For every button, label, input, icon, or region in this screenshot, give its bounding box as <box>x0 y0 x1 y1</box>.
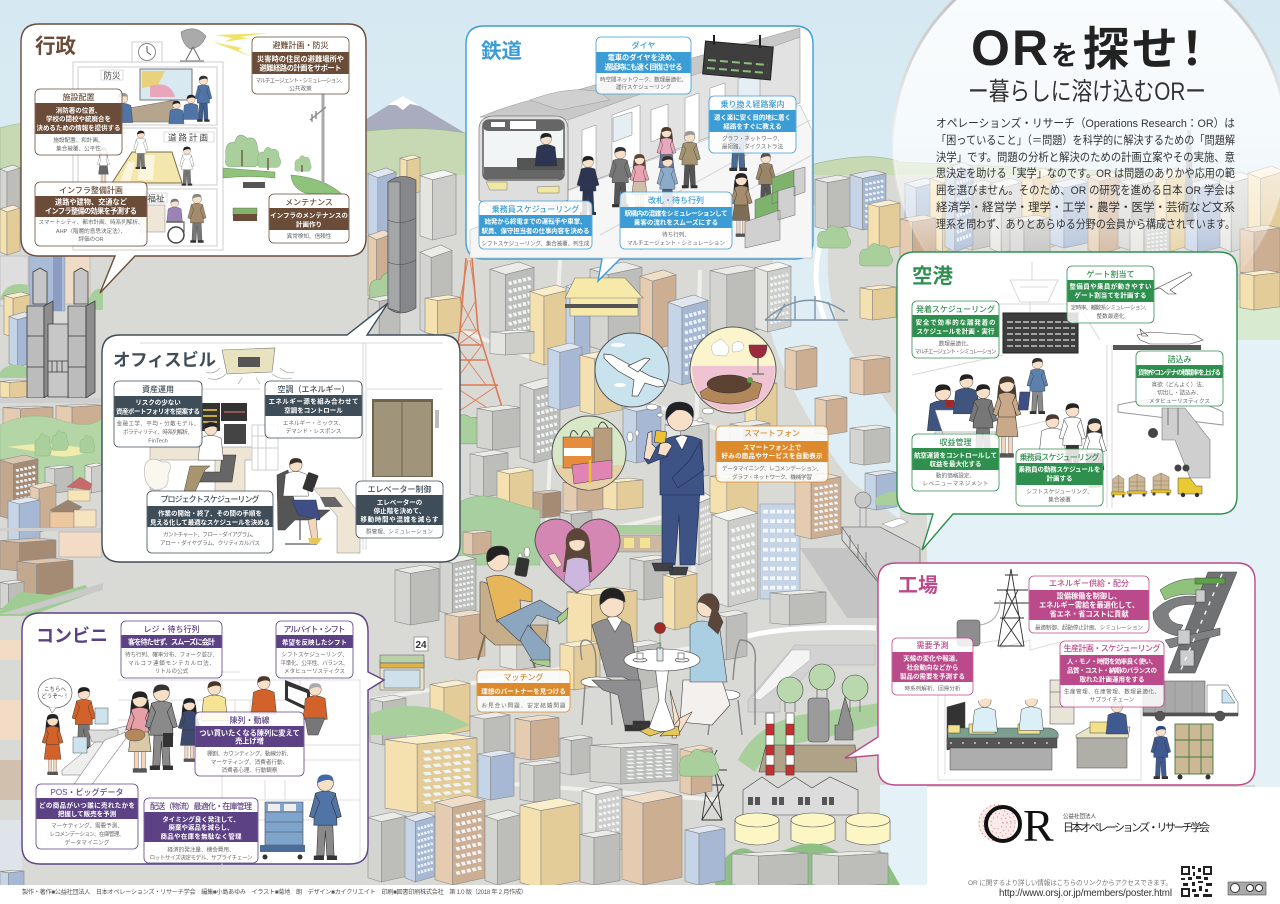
illustration: store interior: こちらへ <box>44 686 66 693</box>
pylon <box>697 750 727 820</box>
card: レジ・待ち行列: リトルの公式 <box>155 667 189 675</box>
airport terminal <box>842 492 920 582</box>
right water <box>880 505 1280 890</box>
heading: 行政 <box>35 35 76 58</box>
card: 需要予測: 需要予測 <box>916 640 948 650</box>
card: インフラ整備計画: スマートシティ、都市計画、時系列解析、 <box>38 218 144 226</box>
table with couple <box>581 588 755 738</box>
logo: OR society: R <box>1023 800 1054 851</box>
heading: 空港 <box>912 265 953 288</box>
card: スマートフォン <box>716 426 828 482</box>
thought bubble: steak <box>690 327 776 413</box>
shrub <box>679 749 719 776</box>
skyline right <box>905 178 937 248</box>
card: 生産計画・スケジューリング: 取れた計画運用をする <box>1080 674 1144 684</box>
card: メンテナンス: 計画作り <box>296 220 322 228</box>
card: 配送（物流）最適化・在庫管理: 廃棄や返品を減らし、 <box>168 822 234 832</box>
card: インフラ整備計画: 評価のOR <box>78 235 104 243</box>
card: 避難計画・防災: 避難計画・防災 <box>272 40 328 50</box>
tall grey tower <box>388 176 416 313</box>
illustration: city hall: 道路計画 <box>168 132 210 142</box>
mountain <box>330 96 480 142</box>
card: 需要予測: 時系列解析、回帰分析 <box>905 684 961 692</box>
heading: 鉄道 <box>481 40 522 63</box>
card: 施設配置: 消防署の位置、 <box>56 106 101 114</box>
card: POS・ビッグデータ: 把握して販売を予測 <box>58 809 117 818</box>
card: ダイヤ: 電車のダイヤを決め、 <box>608 53 679 62</box>
card: 乗務員スケジューリング: 乗務員の勤務スケジュールを <box>1018 464 1100 474</box>
footer white area <box>0 787 1280 904</box>
card: 収益管理: 航空運賃をコントロールして <box>914 450 997 460</box>
card: 空調（エネルギー）: 空調をコントロール <box>284 406 343 414</box>
card: ダイヤ <box>596 37 691 94</box>
card: 乗り換え経路案内: 経路をすぐに教える <box>723 122 782 130</box>
card: 発着スケジューリング: 発着スケジューリング <box>916 304 995 314</box>
panel: airport <box>897 252 1237 550</box>
card: 需要予測: 社会動向などから <box>906 662 958 672</box>
card: エネルギー供給・配分: 最適制御、起動停止計画、シミュレーション <box>1035 624 1143 632</box>
illustration: city hall <box>73 29 343 250</box>
card: スマートフォン: グラフ・ネットワーク、機械学習 <box>732 473 812 481</box>
card: レジ・待ち行列: 待ち行列、確率分布、フォーク並び、 <box>125 650 218 658</box>
card: ゲート割当て <box>1067 266 1154 323</box>
title: 探 <box>1083 23 1129 75</box>
card: エレベーター制御: 移動時間や混雑を減らす <box>360 514 439 524</box>
CC badge <box>1228 882 1266 895</box>
title: せ <box>1132 23 1178 75</box>
card: ゲート割当て: ゲート割当てを計画する <box>1074 290 1146 300</box>
panel: railway <box>466 26 813 281</box>
card: 資産運用: FinTech <box>148 438 168 444</box>
center scene: people <box>478 327 776 776</box>
card: アルバイト・シフト: メタヒューリスティクス <box>284 667 345 675</box>
card: プロジェクトスケジューリング: 作業の開始・終了、その間の手順を <box>158 508 262 518</box>
card: 施設配置 <box>35 89 122 155</box>
card: インフラ整備計画 <box>35 182 147 246</box>
card: スマートフォン: スマートフォン <box>744 429 800 438</box>
card: スマートフォン: 好みの商品やサービスを自動表示 <box>722 451 823 460</box>
title: O <box>971 20 1010 76</box>
card: 収益管理: 収益管理 <box>940 437 972 447</box>
sky-side buildings <box>815 175 851 230</box>
yellow station roof <box>565 278 643 316</box>
bridge <box>765 296 848 320</box>
thought bubble: shopping <box>552 416 626 490</box>
card: 避難計画・防災: 災害時の住民の避難場所や <box>257 54 344 64</box>
card: 資産運用: リスクの少ない <box>135 398 181 406</box>
card: プロジェクトスケジューリング: アロー・ダイヤグラム、クリティカルパス <box>160 539 260 547</box>
card: レジ・待ち行列 <box>121 621 222 678</box>
intro text: 思決定を助ける「実学」なのです。OR は問題のありかや応用の範 <box>936 166 1235 180</box>
card: 施設配置: 学校の閉校や統廃合を <box>46 114 111 123</box>
card: 発着スケジューリング: 安全で効率的な離発着の <box>916 318 996 326</box>
card: 詰込み: 詰込み <box>1168 354 1192 364</box>
illustration: office interior <box>120 343 443 553</box>
card: 詰込み: 貨物やコンテナの積載率を上げる <box>1138 368 1221 376</box>
card: POS・ビッグデータ <box>36 784 138 849</box>
card: プロジェクトスケジューリング: 見える化して最適なスケジュールを決める <box>150 518 270 526</box>
card: マッチング <box>477 670 570 712</box>
footer link text: OR に関するより詳しい情報はこちらのリンクからアクセスできます。 <box>968 878 1172 887</box>
card: 改札・待ち行列: 駅構内の混雑をシミュレーションして <box>624 208 728 218</box>
card: ゲート割当て: ゲート割当て <box>1086 269 1134 279</box>
card: ダイヤ: 運行スケジューリング <box>616 83 672 91</box>
intro text: 「困っていること」（＝問題）を科学的に解決するための「問題解 <box>936 133 1235 147</box>
card: 陳列・動線: 消費者心理、行動観察 <box>222 766 278 774</box>
card: インフラ整備計画: インフラ整備計画 <box>59 185 123 195</box>
card: レジ・待ち行列: マルコフ連鎖モンテカルロ法、 <box>128 659 215 667</box>
illustration: store interior: どうぞ〜！ <box>41 692 69 700</box>
river <box>768 205 900 520</box>
card: 施設配置: 決めるための情報を提供する <box>36 123 120 132</box>
card: 乗務員スケジューリング: シフトスケジューリング、集合被覆、列生成 <box>482 240 590 248</box>
card: アルバイト・シフト: 平準化、公平性、バランス、 <box>280 659 348 667</box>
card: 収益管理: レベニューマネジメント <box>922 480 988 488</box>
panel: convenience store <box>22 613 384 870</box>
card: 需要予測 <box>892 638 973 695</box>
card: 改札・待ち行列: 待ち行列、 <box>662 230 690 238</box>
card: 配送（物流）最適化・在庫管理: ロットサイズ決定モデル、サプライチェーン <box>150 854 253 862</box>
card: 発着スケジューリング: 数理最適化、 <box>939 340 972 348</box>
card: ダイヤ: 遅延時にも速く回復させる <box>604 62 682 72</box>
heading: 工場 <box>898 574 938 597</box>
card: 収益管理: 収益を最大化する <box>930 459 982 468</box>
card: マッチング: お見合い問題、安定結婚問題 <box>482 702 566 710</box>
card: 避難計画・防災 <box>252 37 349 94</box>
twin towers <box>27 268 95 398</box>
card: 生産計画・スケジューリング: 人・モノ・時間を効率良く使い、 <box>1067 656 1157 666</box>
card: 乗り換え経路案内: 乗り換え経路案内 <box>720 99 784 109</box>
illustration: airport terminal <box>912 262 1223 508</box>
card: ダイヤ: 時空間ネットワーク、数理最適化、 <box>600 76 687 84</box>
intro text <box>936 116 1235 231</box>
buildings at middle upper <box>368 168 396 238</box>
card: インフラ整備計画: インフラ整備の効果を予測する <box>45 206 137 216</box>
left strip <box>0 165 20 215</box>
card: 空調（エネルギー）: エネルギー・ミックス、 <box>283 420 344 427</box>
footer link text <box>968 878 1172 899</box>
intro text: オペレーションズ・リサーチ（Operations Research：OR）は <box>936 116 1235 130</box>
card: インフラ整備計画: AHP（階層的意思決定法）、 <box>56 227 126 235</box>
card: エネルギー供給・配分 <box>1029 576 1149 633</box>
card: エレベーター制御: エレベーターの <box>377 498 423 506</box>
card: 乗務員スケジューリング: 乗務員スケジューリング <box>1020 452 1100 462</box>
card: 陳列・動線: マーケティング、消費者行動、 <box>211 758 288 766</box>
card: エレベーター制御: 群管理、シミュレーション <box>366 528 433 536</box>
card: 乗務員スケジューリング: 駅員、保守担当者の仕事内容を決める <box>482 226 590 235</box>
card: 乗務員スケジューリング: 計画する <box>1046 474 1072 482</box>
card: 避難計画・防災: 公共政策 <box>289 84 312 92</box>
card: プロジェクトスケジューリング: プロジェクトスケジューリング <box>160 494 260 504</box>
card: 発着スケジューリング <box>912 301 999 358</box>
card: 資産運用: 資産運用 <box>142 384 174 394</box>
card: 陳列・動線: つい買いたくなる陳列に変えて <box>199 728 300 738</box>
logo: OR society: 公益社団法人 <box>1063 812 1097 820</box>
standing man with smartphone <box>644 402 704 575</box>
Tokyo tower <box>446 258 506 420</box>
intro text: 決学」です。問題の分析と解決のための計画立案やその実施、意 <box>936 150 1235 164</box>
card: メンテナンス: インフラのメンテナンスの <box>270 212 348 220</box>
card: ゲート割当て: 整数最適化 <box>1097 312 1125 320</box>
card: 詰込み: 切出し・詰込み、 <box>1157 388 1202 396</box>
card: 配送（物流）最適化・在庫管理: 配送（物流）最適化・在庫管理 <box>150 801 252 811</box>
title: を <box>1051 41 1078 71</box>
card: 資産運用 <box>114 381 202 447</box>
card: 避難計画・防災: 避難経路の計画をサポート <box>260 64 342 72</box>
card: 配送（物流）最適化・在庫管理: タイミング良く発注して、 <box>162 814 240 824</box>
card: メンテナンス <box>269 194 349 243</box>
card: レジ・待ち行列: 客を待たせず、スムーズに会計 <box>128 638 216 646</box>
card: 陳列・動線 <box>195 712 304 776</box>
credits: 製作・著作■公益社団法人 日本オペレーションズ・リサーチ学会 編集■小島あゆみ イラスト■菊地 朗 デザイン■カイクリエイト 印刷■図書印刷株式会社 第 1.0 版（2018 年 2 月作成） <box>22 888 527 896</box>
card: 生産計画・スケジューリング: 生産管理、在庫管理、数理最適化、 <box>1064 688 1160 696</box>
footer link text: http://www.orsj.or.jp/members/poster.html <box>999 888 1172 899</box>
card: 生産計画・スケジューリング: 品質・コスト・納期のバランスの <box>1067 666 1158 674</box>
intro text: 理系を問わず、ありとあらゆる分野の会員から構成されています。 <box>936 218 1235 231</box>
card: 乗り換え経路案内: グラフ・ネットワーク、 <box>722 134 783 142</box>
card: 避難計画・防災: マルチエージェント・シミュレーション、 <box>256 78 346 84</box>
card: 詰込み: メタヒューリスティクス <box>1149 397 1210 405</box>
card: 空調（エネルギー）: 空調（エネルギー） <box>278 384 350 394</box>
bottom blocks <box>370 695 406 745</box>
card: エレベーター制御: エレベーター制御 <box>368 484 432 494</box>
convenience store building <box>380 637 428 690</box>
logo: OR society <box>978 800 1210 851</box>
card: エレベーター制御 <box>356 481 443 538</box>
illustration: factory floor <box>938 569 1238 780</box>
card: プロジェクトスケジューリング: ガントチャート、フロー・ダイアグラム、 <box>163 530 257 538</box>
card: 資産運用: ボラティリティ、時系列解析、 <box>123 428 193 436</box>
card: レジ・待ち行列: レジ・待ち行列 <box>144 624 200 634</box>
card: 乗務員スケジューリング <box>479 201 592 249</box>
card: 発着スケジューリング: スケジュールを計画・実行 <box>916 326 995 336</box>
card: 空調（エネルギー）: デマンド・レスポンス <box>286 427 342 435</box>
card: エネルギー供給・配分: エネルギー需給を最適化して、 <box>1039 600 1139 610</box>
intro text: 経済学・経営学・理学・工学・農学・医学・芸術など文系 <box>936 200 1235 214</box>
card: 改札・待ち行列 <box>620 192 732 249</box>
card: POS・ビッグデータ: どの商品がいつ誰に売れたかを <box>39 800 135 810</box>
card: 需要予測: 製品の需要を予測する <box>900 672 965 680</box>
title circle <box>893 0 1280 340</box>
QR code <box>1181 866 1212 897</box>
thought dots <box>518 404 714 559</box>
roads <box>368 260 740 800</box>
title: ！ <box>1169 23 1215 75</box>
card: 乗り換え経路案内 <box>709 96 796 153</box>
intro text: 囲を選びません。そのため、OR の研究を進める日本 OR 学会は <box>936 183 1235 197</box>
card: 陳列・動線: 棚割、カウンティング、動線分析、 <box>207 750 292 758</box>
subtitle: ー暮らしに溶け込むORー <box>968 78 1206 106</box>
card: 施設配置: 施設配置、和計画、 <box>53 136 104 144</box>
sitting man in armchair <box>478 546 568 668</box>
card: スマートフォン: データマイニング、レコメンデーション、 <box>722 464 822 472</box>
card: 空調（エネルギー）: エネルギー源を組み合わせて <box>268 396 358 406</box>
card: 陳列・動線: 売上げ増 <box>235 736 264 746</box>
panel: office building <box>102 303 460 562</box>
card: 資産運用: 金融工学、平均・分散モデル、 <box>116 420 200 428</box>
panel: administration <box>21 24 366 293</box>
card: 配送（物流）最適化・在庫管理 <box>144 798 258 863</box>
card: アルバイト・シフト: アルバイト・シフト <box>284 625 346 634</box>
card: 乗務員スケジューリング: シフトスケジューリング、 <box>1026 488 1093 496</box>
card: スマートフォン: スマートフォン上で <box>743 442 802 452</box>
city illustration background: 24 <box>415 640 427 651</box>
card: 発着スケジューリング: マルチエージェント・シミュレーション <box>914 348 997 356</box>
card: 施設配置: 集合被覆、公平性 <box>56 144 101 152</box>
card: アルバイト・シフト <box>276 621 353 678</box>
card: アルバイト・シフト: シフトスケジューリング、 <box>281 650 348 658</box>
card: 収益管理: 動的価格設定、 <box>936 472 975 480</box>
card: 生産計画・スケジューリング <box>1060 641 1164 707</box>
card: 収益管理 <box>912 434 999 491</box>
card: 需要予測: 天候の変化や報道、 <box>903 654 962 662</box>
card: メンテナンス: 異常検知、信頼性 <box>287 232 332 240</box>
card: マッチング: マッチング <box>504 672 544 682</box>
illustration: train and platform <box>470 28 812 258</box>
illustration: city hall: 福祉 <box>147 194 165 204</box>
card: 乗り換え経路案内: 最短路、ダイクストラ法 <box>722 142 784 150</box>
card: POS・ビッグデータ: マーケティング、需要予測、 <box>51 822 123 830</box>
card: POS・ビッグデータ: POS・ビッグデータ <box>51 787 123 797</box>
illustration: city hall: 防災 <box>103 70 121 80</box>
thought bubble: airplane <box>595 333 669 407</box>
illustration: store interior <box>38 672 360 870</box>
card: 乗務員スケジューリング: 乗務員スケジューリング <box>492 204 579 214</box>
factory zone <box>748 645 875 712</box>
logo: OR society: 日本オペレーションズ・リサーチ学会 <box>1063 820 1210 834</box>
center blocks <box>490 330 534 355</box>
card: POS・ビッグデータ: データマイニング <box>65 838 110 846</box>
card: 改札・待ち行列: 乗客の流れをスムーズにする <box>634 218 718 226</box>
card: エレベーター制御: 停止階を決めて、 <box>374 506 425 515</box>
card: 陳列・動線: 陳列・動線 <box>230 715 270 725</box>
card: POS・ビッグデータ: レコメンデーション、在庫管理、 <box>50 830 124 838</box>
card: 詰込み: 貪欲（どんよく）法、 <box>1152 380 1207 388</box>
card: 乗り換え経路案内: 速く楽に安く目的地に着く <box>714 112 791 122</box>
card: 改札・待ち行列: マルチエージェント・シミュレーション <box>627 240 725 247</box>
card: ゲート割当て: 定時率、離散系シミュレーション、 <box>1071 304 1150 312</box>
card: ダイヤ: ダイヤ <box>632 40 655 50</box>
card: メンテナンス: メンテナンス <box>285 198 333 207</box>
callouts: personal <box>477 426 828 712</box>
card: ゲート割当て: 整備員や乗員が動きやすい <box>1070 282 1152 290</box>
title: R <box>1012 20 1048 76</box>
card: 空調（エネルギー） <box>265 381 362 438</box>
title <box>971 20 1215 76</box>
card: エネルギー供給・配分: エネルギー供給・配分 <box>1049 578 1129 588</box>
card: 生産計画・スケジューリング: サプライチェーン <box>1090 696 1135 704</box>
card: 乗務員スケジューリング <box>1016 449 1103 506</box>
panel: factory <box>845 563 1255 785</box>
heart with woman <box>535 519 620 593</box>
card: マッチング: 理想のパートナーを見つける <box>481 686 566 696</box>
card: 配送（物流）最適化・在庫管理: 経済的発注量、機会費用、 <box>167 846 235 854</box>
card: 配送（物流）最適化・在庫管理: 商品や在庫を無駄なく管理 <box>160 832 242 840</box>
card: 詰込み <box>1136 351 1223 406</box>
card: 改札・待ち行列: 改札・待ち行列 <box>648 195 704 205</box>
card: 生産計画・スケジューリング: 生産計画・スケジューリング <box>1064 643 1160 653</box>
card: 乗務員スケジューリング: 集合被覆 <box>1048 496 1071 504</box>
card: アルバイト・シフト: 希望を反映したシフト <box>282 638 347 646</box>
card: 資産運用: 資産ポートフォリオを提案する <box>116 406 200 416</box>
heading: コンビニ <box>36 625 108 646</box>
card: プロジェクトスケジューリング <box>147 491 273 553</box>
card: エネルギー供給・配分: 省エネ・省コストに貢献 <box>1049 610 1129 618</box>
heading: オフィスビル <box>113 350 216 370</box>
card: エネルギー供給・配分: 設備稼働を制御し、 <box>1057 592 1121 600</box>
card: 施設配置: 施設配置 <box>62 92 94 102</box>
card: 乗務員スケジューリング: 始発から終電までの運転手や車掌、 <box>484 216 586 226</box>
card: インフラ整備計画: 道路や建物、交通など <box>55 198 128 206</box>
